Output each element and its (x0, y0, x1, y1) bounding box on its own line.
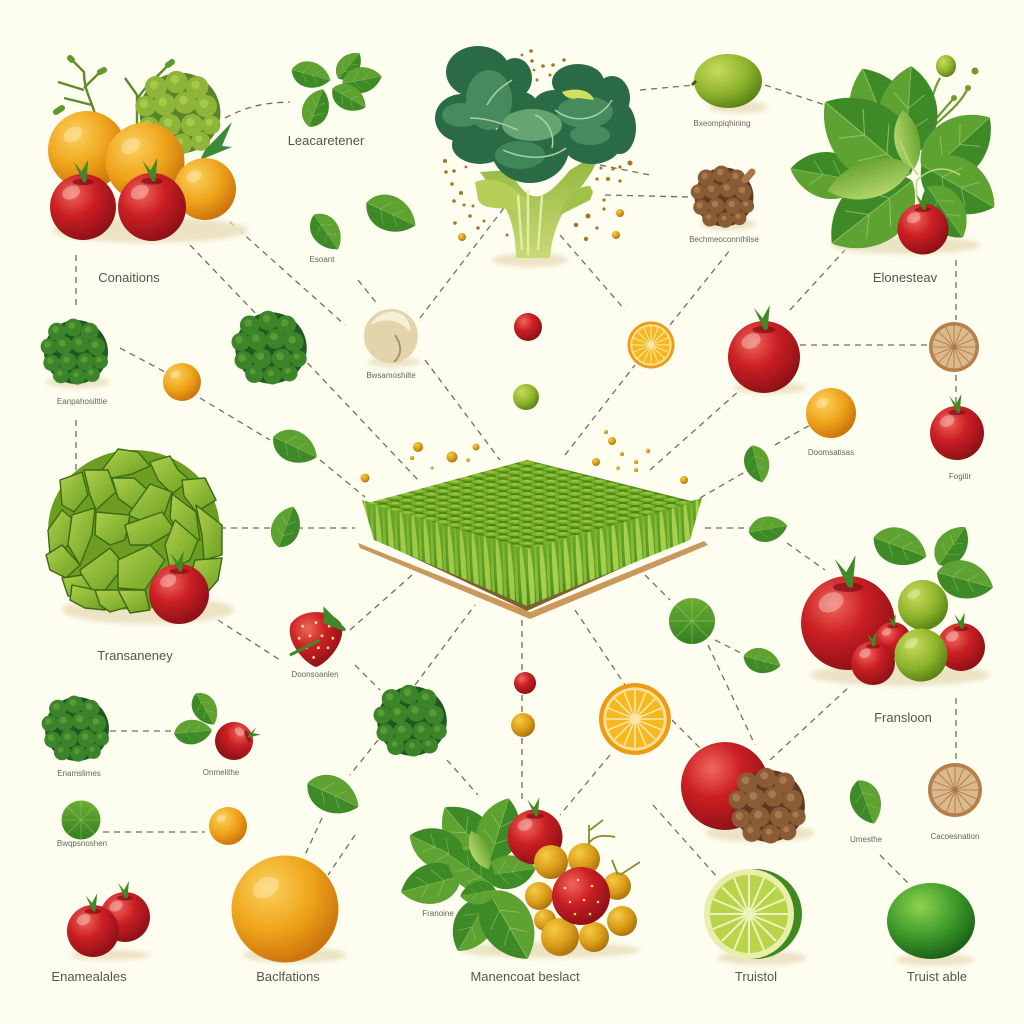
icon: green apple (887, 883, 975, 966)
icon: small leaf (740, 644, 784, 678)
label: Manencoat beslact: Manencoat beslact (470, 969, 580, 984)
label: Truistol: Truistol (735, 969, 777, 984)
icon: large orange slice (599, 683, 671, 755)
icon: orange ball (806, 388, 856, 438)
icon: orange dot lower (511, 713, 535, 737)
icon: twigs (56, 58, 172, 125)
icon: broccoli ball centre (374, 685, 447, 757)
icon: spore dots around broccoli (443, 49, 632, 241)
central grass platform (358, 460, 708, 619)
label: berry: Onmelithe (203, 768, 240, 777)
panel: right tomato cluster (801, 519, 998, 686)
label: garlic: Bwsamoshilte (366, 371, 416, 380)
label: Franoine: Franoine (422, 909, 454, 918)
icon: leaves with red berry (173, 688, 266, 765)
icon: brown cone (691, 166, 756, 230)
label: Truist able: Truist able (907, 969, 967, 984)
icon: green bumpy gourd (135, 71, 220, 154)
panel: two tomatoes (67, 881, 150, 960)
label: Transaneney: Transaneney (97, 648, 173, 663)
panel: large cabbage and tomato (46, 449, 234, 624)
icon: broccoli (435, 46, 636, 267)
label: brown slice: Cacoesnation (931, 832, 979, 841)
label: strawberry: Doonsoanlen (291, 670, 339, 679)
label: left broccoli: Eanpahosilttie (57, 397, 108, 406)
label: Esoant: Esoant (310, 255, 335, 264)
grass right wall (527, 498, 702, 606)
label: Fogitir: Fogitir (949, 472, 971, 481)
icon: small orange (163, 363, 201, 401)
label: Baclfations: Baclfations (256, 969, 320, 984)
panel: golden seeds above platform (360, 430, 688, 484)
label: Elonesteav: Elonesteav (873, 270, 938, 285)
row: broccoli ball left (41, 319, 110, 388)
icon: red dot (514, 313, 542, 341)
icon: tomato right (930, 394, 984, 460)
icon: leaf left mid (266, 502, 306, 552)
label: round leaf: Bwqpsnoshen (57, 839, 107, 848)
icon: orange slice (628, 322, 674, 368)
panel: red fruit with cone (681, 742, 815, 843)
icon: leaf right (740, 442, 774, 486)
label: Enamealales: Enamealales (51, 969, 127, 984)
label: Fransloon: Fransloon (874, 710, 932, 725)
dashed connector network (76, 85, 956, 885)
label: leaf lower right: Umesthe (850, 835, 883, 844)
grass top surface (368, 460, 695, 549)
icon: leaf lower (300, 767, 366, 823)
icon: top leaves sprig (288, 47, 384, 131)
panel: top-left fruit cluster (48, 58, 248, 243)
icon: green round leaf (62, 800, 100, 840)
icon: round leaf (669, 598, 715, 644)
icon: broccoli ball (231, 311, 307, 384)
label: orange: Doomsatisas (808, 448, 854, 457)
icon: small orange lower (209, 807, 247, 845)
icon: tomato (728, 305, 806, 394)
icon: lime top (692, 54, 768, 113)
grass left wall (362, 500, 527, 606)
label: cone small: Bechmeoconnthlise (689, 235, 759, 244)
icon: leaf (267, 423, 323, 471)
icon: pair of leaves (303, 187, 423, 257)
icon: large orange (232, 856, 347, 963)
icon: strawberry (290, 610, 345, 667)
label: lower left broccoli: Enamslimes (57, 769, 101, 778)
icon: green leaf with brown slice (844, 763, 982, 829)
icon: green dot (513, 384, 539, 410)
label: Leacaretener: Leacaretener (288, 133, 365, 148)
label: lime small: Bxeompiqhining (694, 119, 750, 128)
icon: leaf right mid (747, 513, 789, 545)
icon: garlic (364, 309, 420, 367)
icon: brown slice (929, 322, 979, 372)
icon: broccoli ball lower left (42, 696, 109, 762)
label: Conaitions: Conaitions (98, 270, 160, 285)
panel: basil with tomato (787, 55, 1009, 269)
panel: bottom centre cluster (396, 792, 640, 971)
icon: red dot lower (514, 672, 536, 694)
icon: lime slice (704, 869, 807, 965)
